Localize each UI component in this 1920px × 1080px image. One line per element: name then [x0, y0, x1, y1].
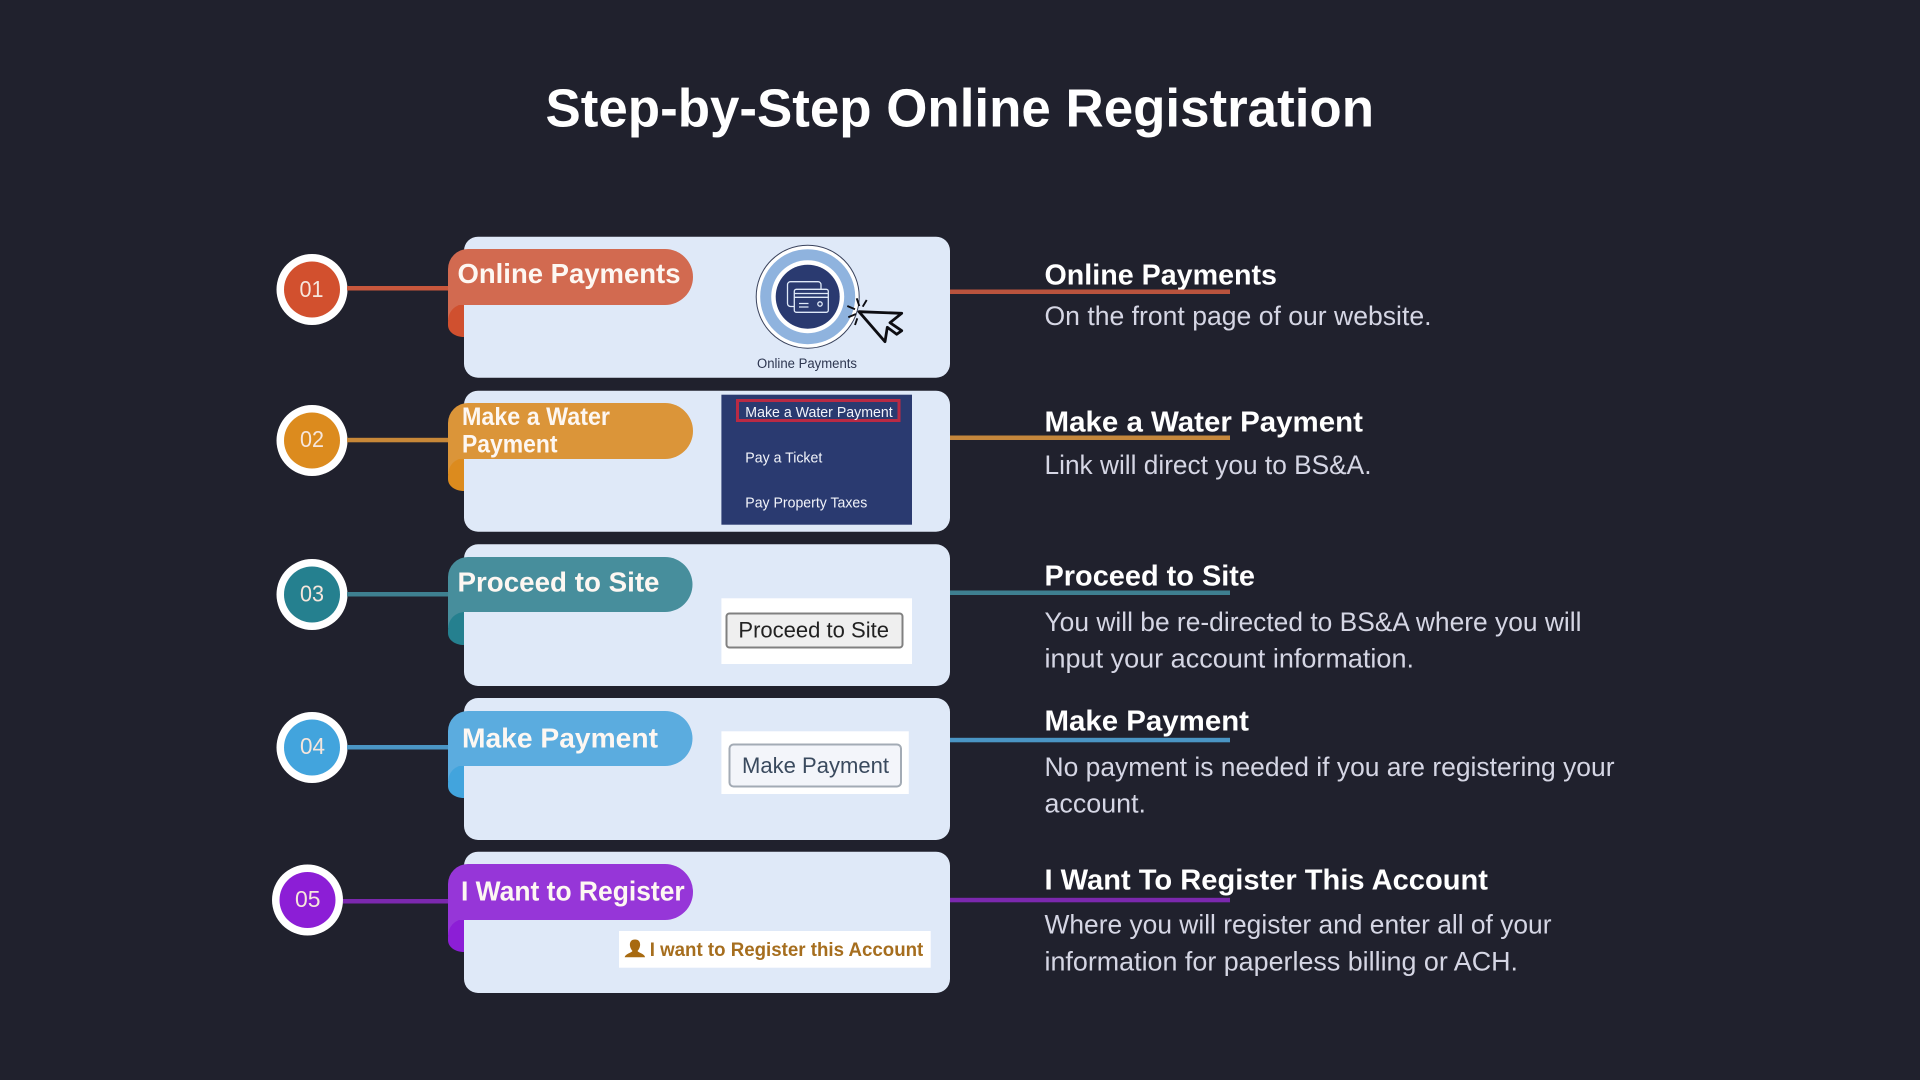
icon: mouse cursor [847, 298, 902, 342]
description 05: I Want To Register This Account [1044, 864, 1488, 896]
screenshot: register link: I want to Register this Account [650, 940, 924, 961]
description 03: Proceed to Site [1044, 561, 1255, 593]
description 03: You will be re-directed to BS&A where you will [1044, 607, 1582, 637]
label tail 04 [448, 761, 464, 798]
icon: person [625, 940, 645, 957]
screenshot: register link [619, 931, 931, 968]
screenshot: payment menu: Pay a Ticket [745, 450, 822, 466]
label 05: I Want to Register [461, 876, 685, 907]
card 01 [464, 237, 950, 378]
card 05 [464, 852, 950, 993]
label 04: Make Payment [462, 723, 658, 754]
number badge 03 [276, 559, 348, 630]
description 03: input your account information. [1044, 644, 1414, 674]
icon: payment card [788, 282, 828, 312]
label 02 [448, 403, 693, 459]
description 05 [950, 864, 1552, 977]
description 05: information for paperless billing or ACH. [1044, 947, 1518, 977]
connector 01 [347, 286, 449, 290]
description 03 [950, 561, 1582, 674]
number badge 03: 03 [300, 580, 324, 606]
number badge 04: 04 [300, 733, 325, 759]
icon caption: Online Payments [757, 356, 857, 371]
highlight box [738, 400, 899, 420]
screenshot: payment menu: Pay Property Taxes [745, 496, 867, 512]
description 02: Link will direct you to BS&A. [1044, 450, 1372, 480]
screenshot: make payment button [721, 731, 909, 794]
description 01: Online Payments [1044, 259, 1277, 291]
screenshot: proceed button: Proceed to Site [738, 617, 889, 642]
label 03: Proceed to Site [458, 567, 660, 598]
step 4: make payment [276, 698, 1614, 840]
label 03 [448, 557, 692, 612]
step 5: i want to register [272, 852, 1552, 993]
label 02: Make a Water [462, 403, 610, 431]
description 04: account. [1044, 789, 1146, 819]
step 3: proceed to site [276, 544, 1582, 686]
description 04 [950, 705, 1614, 819]
label tail 01 [448, 300, 464, 337]
label 01 [448, 249, 693, 305]
screenshot: payment menu: Make a Water Payment [745, 405, 893, 421]
number badge 02 [276, 405, 348, 476]
number badge 01: 01 [300, 276, 324, 302]
label tail 05 [448, 915, 464, 952]
description 01: On the front page of our website. [1044, 301, 1432, 331]
description 04: Make Payment [1044, 705, 1249, 737]
description 02 [950, 407, 1372, 480]
number badge 05 [272, 864, 343, 936]
description 05: Where you will register and enter all of your [1044, 909, 1552, 939]
card 04 [464, 698, 950, 840]
description 01 [950, 259, 1432, 331]
step 1: online payments [276, 237, 1432, 378]
label tail 02 [448, 454, 464, 491]
description 04: No payment is needed if you are registering your [1044, 752, 1614, 782]
screenshot: proceed button [721, 598, 912, 664]
screenshot: make payment button: Make Payment [742, 753, 889, 778]
connector 05 [343, 899, 449, 904]
connector 03 [347, 592, 449, 596]
step 2: make a water payment [276, 391, 1372, 532]
label 04 [448, 711, 692, 766]
card 02 [464, 391, 950, 532]
connector 02 [347, 438, 449, 442]
number badge 05: 05 [295, 886, 320, 912]
screenshot: payment menu [721, 395, 912, 525]
label 05 [448, 864, 693, 920]
number badge 01 [276, 254, 348, 325]
number badge 04 [276, 712, 348, 783]
title: Step-by-Step Online Registration [546, 79, 1374, 139]
connector 04 [347, 745, 449, 750]
label 02: Payment [462, 431, 558, 459]
number badge 02: 02 [300, 426, 324, 452]
label tail 03 [448, 608, 464, 645]
screenshot: online payments icon [756, 245, 902, 371]
description 02: Make a Water Payment [1044, 407, 1363, 439]
card 03 [464, 544, 950, 686]
label 01: Online Payments [458, 258, 680, 289]
